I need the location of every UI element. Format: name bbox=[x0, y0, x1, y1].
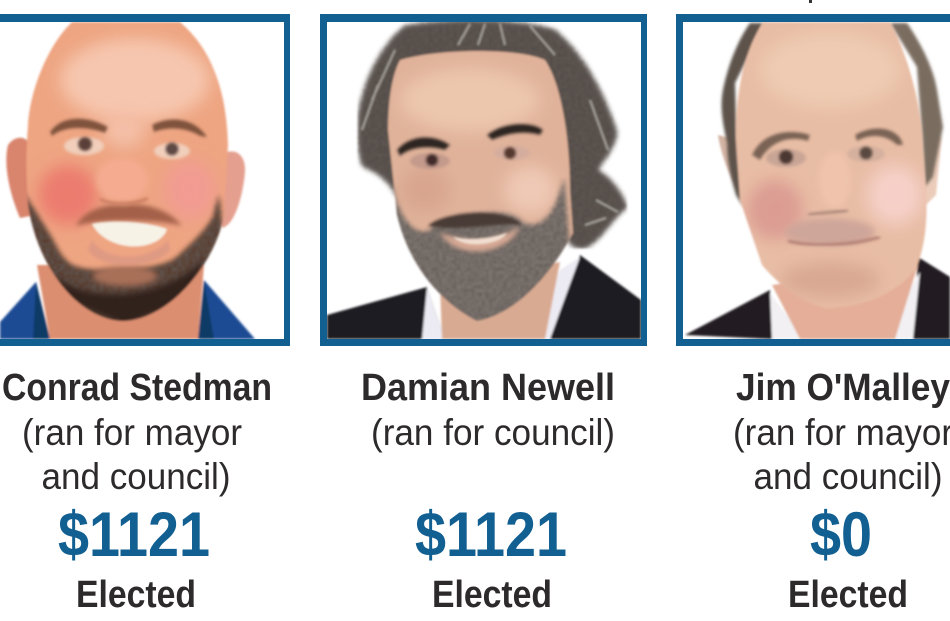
note: (ran for council) bbox=[371, 412, 615, 453]
neck bbox=[37, 265, 204, 339]
portrait: Damian Newell bbox=[327, 20, 641, 339]
top text fragment bbox=[809, 0, 812, 3]
shirt bbox=[0, 281, 38, 339]
nose shadow bbox=[808, 210, 848, 215]
shirt bbox=[770, 272, 920, 339]
head bbox=[736, 22, 927, 308]
note: (ran for mayor bbox=[22, 412, 242, 453]
neck bbox=[440, 262, 560, 339]
frame bbox=[676, 14, 950, 346]
status: Elected bbox=[432, 574, 552, 616]
amount: $1121 bbox=[415, 500, 567, 570]
name: Conrad Stedman bbox=[2, 367, 272, 409]
panel: Jim O'Malley bbox=[676, 14, 950, 616]
eyes bbox=[766, 149, 806, 167]
name: Damian Newell bbox=[361, 367, 615, 409]
frame bbox=[0, 14, 290, 346]
portrait: Jim O'Malley bbox=[685, 22, 950, 339]
jacket bbox=[685, 257, 950, 339]
hair bbox=[722, 23, 765, 207]
shirt bbox=[422, 257, 580, 339]
amount: $1121 bbox=[58, 500, 210, 570]
jacket bbox=[327, 255, 641, 339]
brows bbox=[50, 119, 108, 136]
brows bbox=[752, 132, 810, 160]
chin patch bbox=[93, 266, 157, 286]
moustache bbox=[76, 204, 182, 226]
amount: $0 bbox=[810, 500, 872, 570]
nose bbox=[96, 158, 148, 202]
brows bbox=[397, 137, 450, 156]
mouth bbox=[453, 233, 507, 244]
portrait: Conrad Stedman bbox=[0, 22, 255, 339]
status: Elected bbox=[76, 574, 196, 616]
beard bbox=[394, 178, 572, 322]
jaw shadow bbox=[58, 260, 204, 321]
eyes bbox=[64, 137, 104, 155]
head bbox=[26, 22, 230, 270]
status: Elected bbox=[788, 574, 908, 616]
hair strands bbox=[362, 24, 618, 225]
head bbox=[386, 49, 575, 242]
mouth bbox=[788, 237, 880, 245]
panel: Damian Newell bbox=[320, 14, 647, 616]
note line 2: and council) bbox=[754, 456, 942, 497]
moustache bbox=[428, 213, 522, 228]
note line 2: and council) bbox=[42, 456, 230, 497]
eyes bbox=[410, 153, 450, 169]
beard bbox=[26, 194, 224, 321]
lip bbox=[89, 242, 169, 263]
neck bbox=[772, 265, 918, 339]
ears bbox=[6, 138, 32, 218]
lip area bbox=[440, 226, 520, 251]
hair bbox=[358, 20, 627, 248]
mouth bbox=[92, 222, 167, 246]
frame bbox=[320, 14, 647, 346]
ears bbox=[717, 134, 738, 182]
panel: Conrad Stedman bbox=[0, 14, 290, 616]
